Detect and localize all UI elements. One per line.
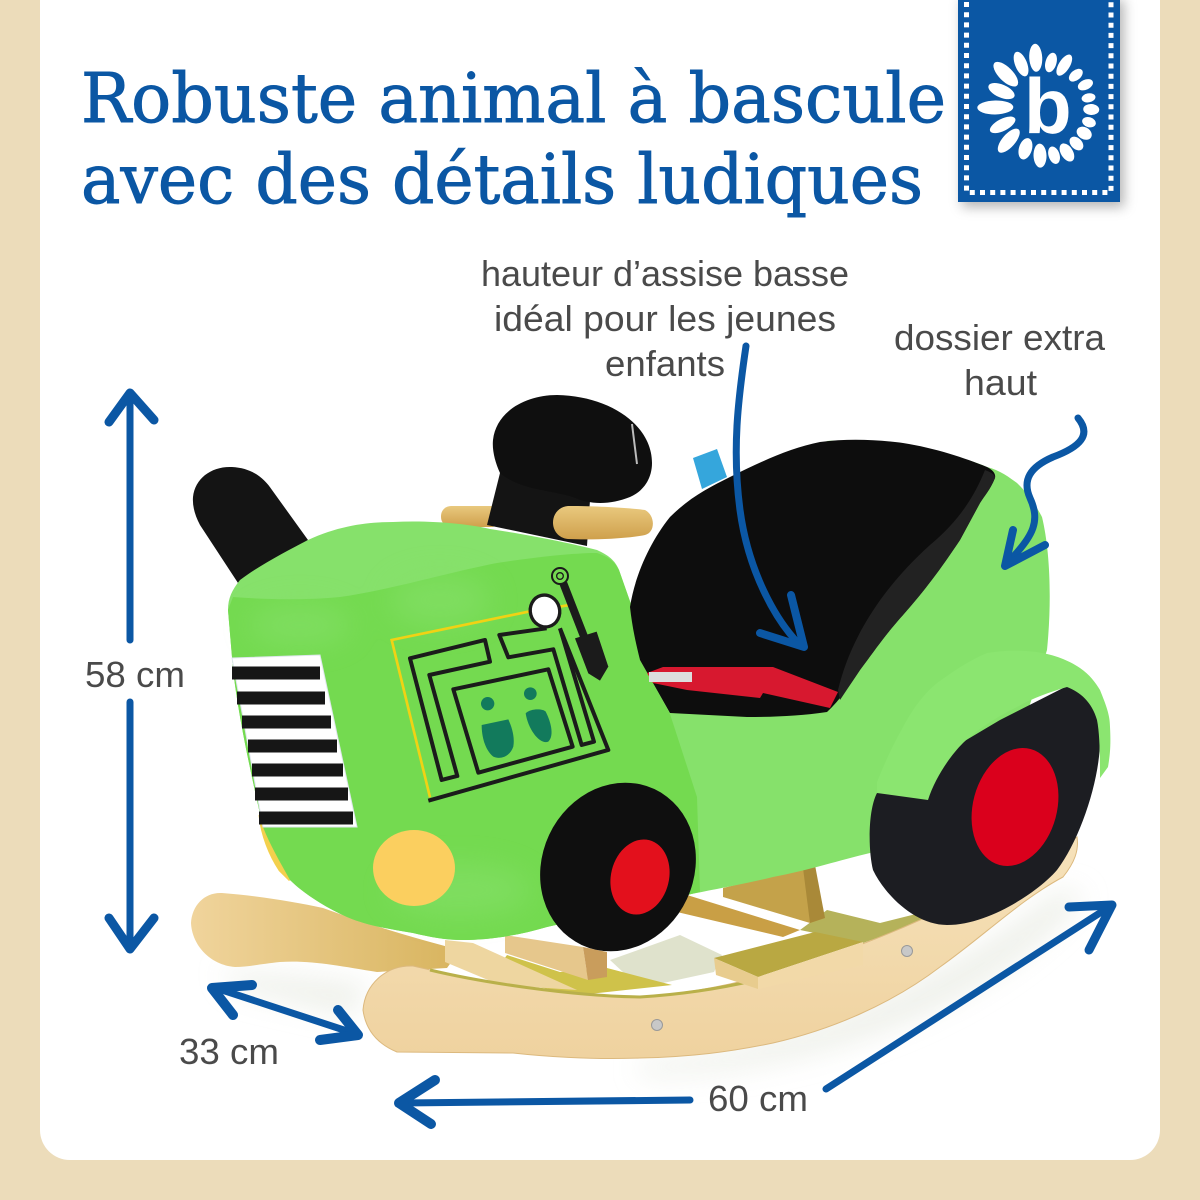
olive plane right — [800, 910, 927, 943]
logo badge: b — [1024, 62, 1072, 150]
blue tag — [693, 449, 727, 489]
steering head — [487, 395, 652, 546]
front rocker — [363, 837, 1077, 1059]
screws — [652, 946, 912, 1030]
labels: dossier extra — [894, 317, 1106, 358]
hood front face — [228, 553, 700, 940]
front hub — [603, 833, 677, 921]
back rocker — [191, 893, 460, 972]
rocker olive rim — [430, 947, 860, 997]
hood blotches — [250, 575, 530, 915]
cross beam right — [677, 895, 800, 937]
seat — [630, 440, 995, 717]
cross beam left — [445, 940, 577, 990]
yellow underside — [260, 815, 290, 880]
grille — [232, 655, 357, 827]
exhaust — [193, 467, 308, 583]
rocking tractor — [191, 395, 1110, 1075]
arrow: width bottom — [399, 1080, 690, 1124]
rear wheel — [870, 686, 1100, 925]
title — [81, 60, 946, 220]
arrow: height down — [109, 702, 154, 949]
title: avec des détails ludiques — [81, 141, 923, 220]
rear hub — [959, 738, 1071, 876]
floor between rockers — [610, 935, 722, 988]
labels: haut — [964, 362, 1037, 403]
labels: enfants — [605, 343, 725, 384]
labels: 60 cm — [708, 1078, 808, 1119]
seat block left — [505, 935, 607, 980]
arrow: height up — [109, 393, 154, 640]
rear fender — [877, 651, 1110, 800]
tractor body — [228, 441, 1050, 940]
arrow: depth — [212, 985, 358, 1040]
floor shadows — [220, 890, 1085, 1075]
olive plane — [490, 955, 672, 995]
dashboard embroidery — [392, 568, 608, 801]
title: Robuste animal à bascule — [81, 60, 946, 139]
labels: 33 cm — [179, 1031, 279, 1072]
arrow: backrest — [1005, 418, 1084, 566]
red belt — [647, 667, 838, 708]
labels: 58 cm — [85, 654, 185, 695]
seat bevel — [838, 470, 995, 700]
footrest block — [714, 932, 863, 989]
arrow: seat — [736, 346, 804, 647]
logo badge — [958, 0, 1124, 207]
yellow headlight — [373, 830, 455, 906]
labels — [85, 253, 1106, 1119]
front wheel — [513, 757, 723, 977]
labels: idéal pour les jeunes — [494, 298, 836, 339]
arrow: width right — [826, 905, 1112, 1089]
wooden handle left — [441, 506, 501, 527]
wooden handle right — [553, 506, 653, 539]
labels: hauteur d’assise basse — [481, 253, 849, 294]
seat block right — [723, 865, 825, 923]
